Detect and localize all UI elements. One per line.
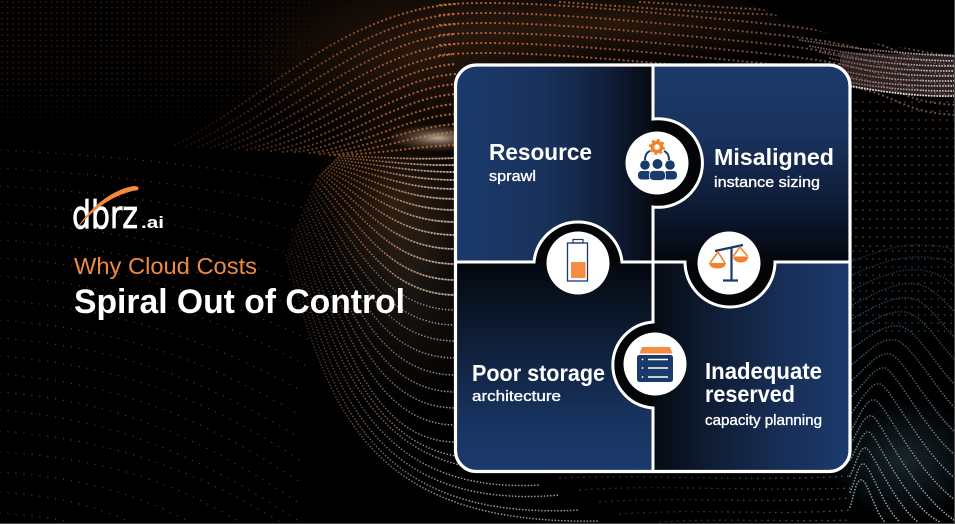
icon: balance scale — [698, 232, 760, 294]
logo swoosh — [76, 186, 138, 230]
puzzle dividers — [456, 65, 850, 471]
title line 1: Why Cloud Costs — [74, 253, 257, 279]
text: poor storage architecture: architecture — [472, 388, 561, 405]
title line 2: Spiral Out of Control — [74, 283, 405, 321]
title — [74, 253, 405, 321]
panel: four-quadrant puzzle — [455, 64, 851, 473]
text: resource sprawl: sprawl — [489, 168, 536, 185]
text: inadequate reserved capacity planning: capacity planning — [705, 412, 822, 429]
logo: dbrz.ai: .ai — [141, 213, 164, 232]
text: inadequate reserved capacity planning: Inadequate — [705, 358, 822, 384]
icon: server storage — [624, 332, 686, 396]
icon: team with gear — [626, 132, 688, 194]
quadrant backgrounds — [455, 64, 851, 473]
panel border — [456, 65, 850, 472]
black top-right corner — [745, 0, 955, 52]
logo: dbrz.ai: dbrz — [72, 193, 138, 237]
text: poor storage architecture — [472, 360, 605, 405]
text: poor storage architecture: Poor storage — [472, 360, 605, 386]
text: resource sprawl — [489, 139, 592, 185]
text: misaligned instance sizing: Misaligned — [714, 144, 834, 170]
text: inadequate reserved capacity planning: reserved — [705, 381, 795, 407]
text: misaligned instance sizing: instance sizing — [714, 174, 820, 191]
text: resource sprawl: Resource — [489, 139, 592, 165]
icon: battery — [546, 232, 610, 294]
text: inadequate reserved capacity planning — [705, 358, 822, 429]
text: misaligned instance sizing — [714, 144, 834, 191]
